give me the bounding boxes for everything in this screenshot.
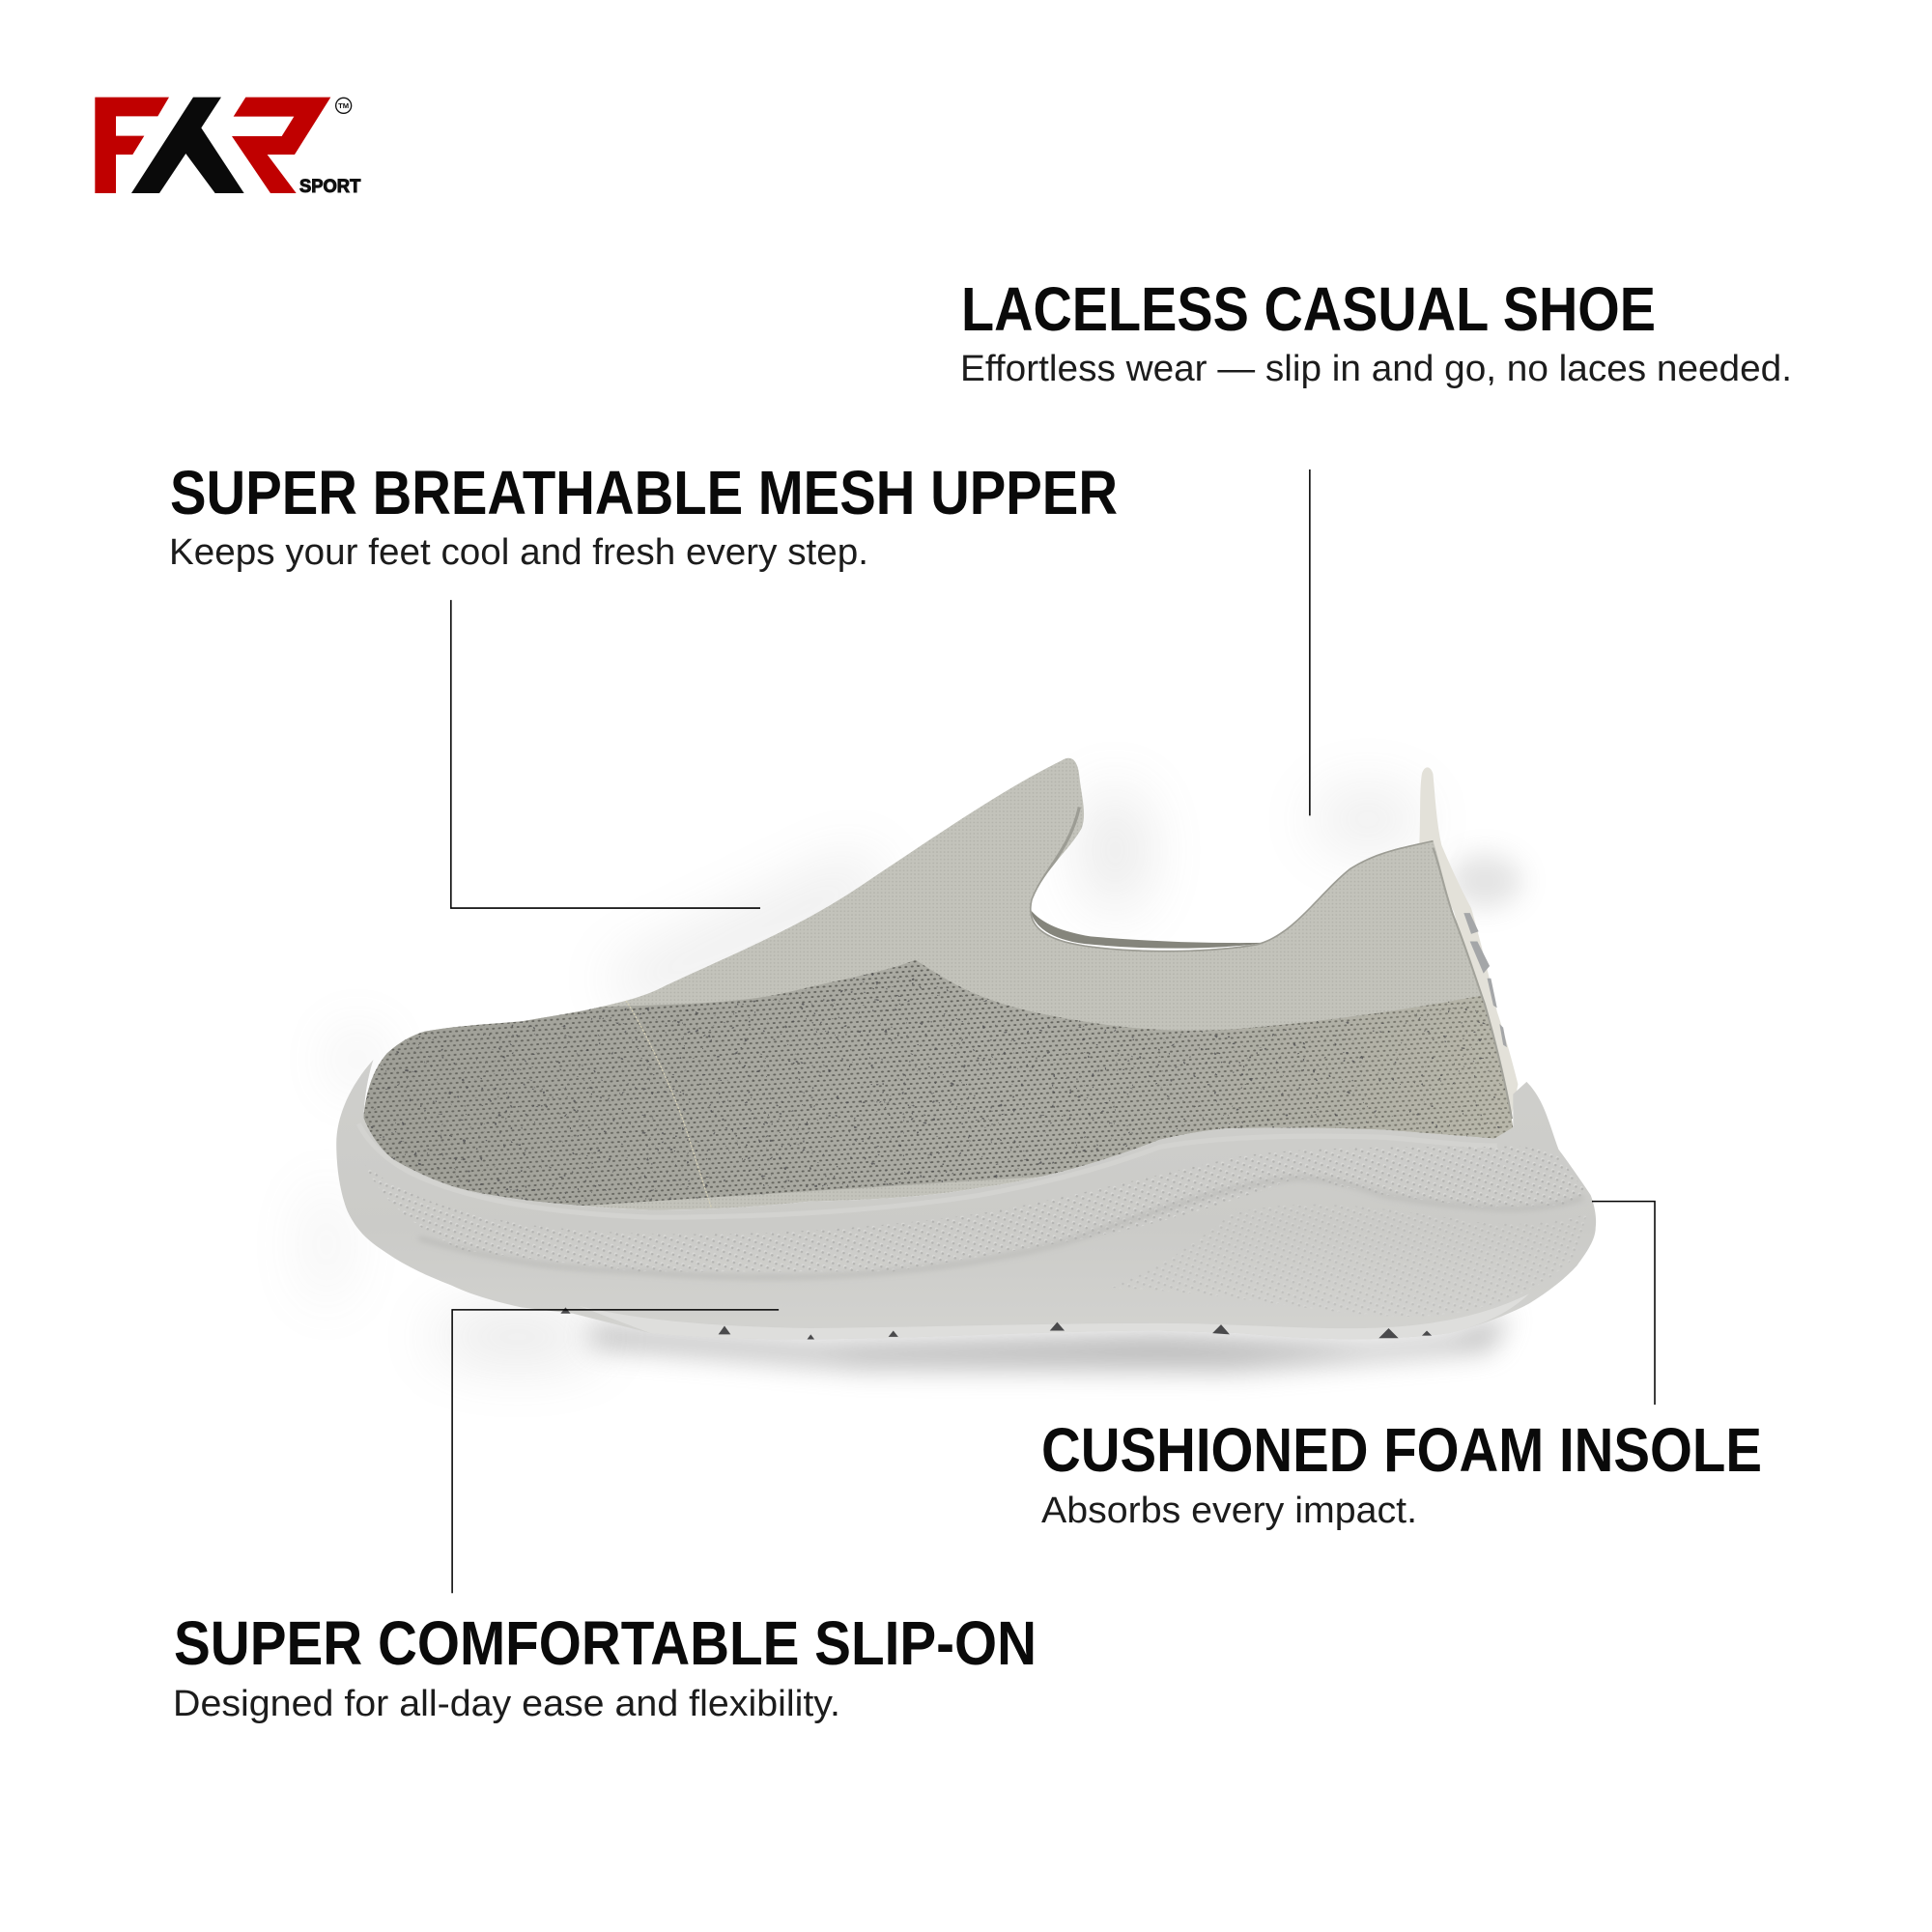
leader line: laceless: [1309, 469, 1311, 815]
leader line: mesh upper: [451, 600, 760, 908]
toe seam: [626, 1001, 712, 1210]
description: Effortless wear — slip in and go, no laces needed.: [960, 349, 1792, 389]
midsole: [336, 1060, 1596, 1339]
leader line: foam insole: [1592, 1202, 1655, 1405]
midsole upper texture band: [365, 1146, 1587, 1271]
midsole ridge: [419, 1178, 1583, 1277]
logo letter F: [95, 98, 169, 193]
mesh speckles: [367, 966, 1511, 1204]
logo letter R: [232, 98, 330, 193]
collar stitched edge: [1032, 807, 1433, 951]
description: Designed for all-day ease and flexibility.: [173, 1684, 840, 1724]
midsole body: [336, 1060, 1596, 1339]
heading: SUPER COMFORTABLE SLIP-ON: [174, 1608, 1037, 1678]
knit mesh panel: [363, 960, 1513, 1206]
callout: comfortable slip-on: [173, 1608, 1037, 1724]
outsole tread notches: [560, 1307, 1432, 1339]
back heel strip and pull tab: [1419, 767, 1518, 1122]
callout: breathable mesh upper: [169, 458, 1118, 573]
description: Absorbs every impact.: [1041, 1491, 1417, 1531]
heel edge piping: [1433, 848, 1512, 1119]
callout: laceless casual shoe: [960, 274, 1792, 389]
outsole white lower edge: [579, 1293, 1529, 1339]
upper cuff: [363, 757, 1513, 1209]
heading: CUSHIONED FOAM INSOLE: [1041, 1415, 1762, 1485]
callout: cushioned foam insole: [1041, 1415, 1762, 1531]
logo trademark: [336, 98, 352, 113]
heel strip logo marks: [1463, 913, 1507, 1047]
shoe soft shadows: [304, 788, 1521, 1370]
logo: FXR Sport: [95, 98, 361, 197]
midsole rim highlight: [358, 1123, 1497, 1217]
logo word SPORT: SPORT: [299, 177, 361, 197]
midsole lower texture: [1109, 1205, 1587, 1317]
logo letter K: [131, 98, 244, 193]
heading: LACELESS CASUAL SHOE: [961, 274, 1656, 344]
knit upper: [363, 757, 1513, 1209]
heading: SUPER BREATHABLE MESH UPPER: [170, 458, 1118, 527]
description: Keeps your feet cool and fresh every step.: [169, 532, 868, 573]
collar interior: [1030, 909, 1269, 949]
shoe photo illustration: [304, 469, 1655, 1593]
leader line: slip-on: [452, 1310, 779, 1593]
logo trademark: TM: [338, 101, 349, 110]
